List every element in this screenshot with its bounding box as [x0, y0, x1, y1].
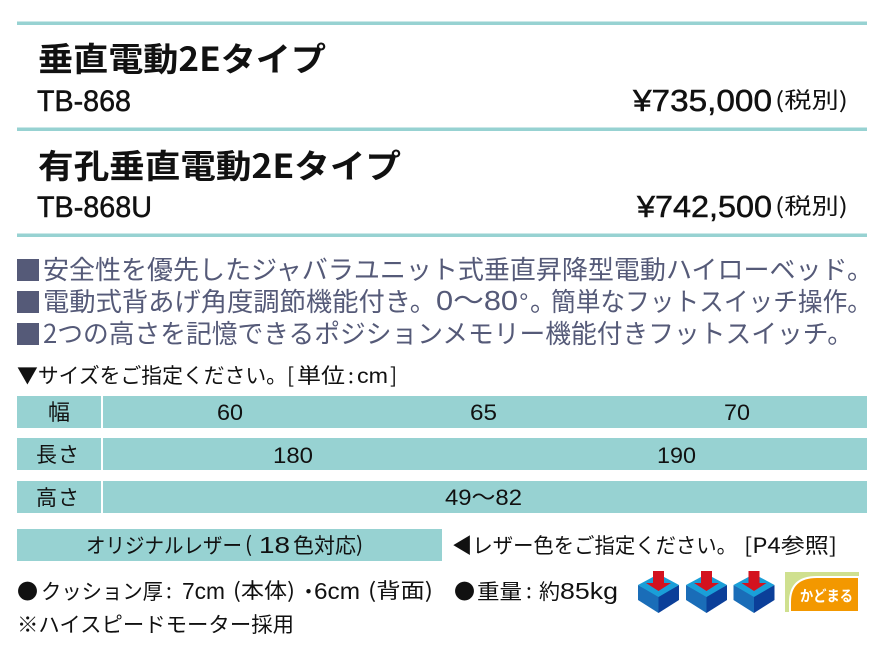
price 2: (税別) [775, 189, 848, 221]
size heading: ] [390, 360, 397, 390]
cushion spec: (背面) [368, 575, 433, 605]
size table: length: 180 [273, 443, 313, 468]
cushion spec: クッション厚 [41, 576, 163, 606]
model number 1: TB-868 [37, 85, 131, 118]
size table: length [17, 438, 867, 470]
title: model 1: 垂直電動2Eタイプ [38, 33, 326, 81]
weight spec: 約 [539, 576, 560, 606]
leather bar: 色対応 [293, 530, 356, 560]
icon: box with arrow 3 [734, 571, 774, 613]
size table: length: 長さ [36, 439, 80, 469]
icon: box with arrow 1 [638, 571, 679, 613]
leather bar: ( [245, 529, 252, 559]
feature list: 0〜80 [436, 285, 518, 316]
size table: height [17, 481, 867, 513]
feature list [17, 250, 873, 351]
size table: width [17, 395, 867, 428]
size heading: ▼サイズをご指定ください。 [17, 360, 287, 390]
price 1 [632, 83, 848, 118]
icon: kadomaru badge: かどまる [800, 585, 853, 606]
size heading: 単位 [297, 360, 345, 390]
cushion spec: (本体) [233, 575, 295, 605]
size heading: cm [357, 365, 388, 388]
size table: height: 49〜82 [445, 485, 522, 510]
feature list: 2つの高さを記憶できるポジションメモリー機能付きフットスイッチ。 [43, 314, 853, 351]
price 2: ¥742,500 [636, 189, 772, 224]
size table: width: 60 [217, 400, 243, 425]
price 2 [636, 189, 848, 224]
size table: width: 70 [724, 400, 750, 425]
title: model 2: 有孔垂直電動2Eタイプ [38, 140, 401, 188]
leather colour note: [P4参照] [744, 530, 837, 560]
weight spec: 85kg [560, 578, 618, 604]
cushion spec: 6cm [314, 578, 360, 604]
feature list: 安全性を優先したジャバラユニット式垂直昇降型電動ハイローベッド。 [43, 250, 873, 287]
cushion spec: : [166, 575, 172, 605]
model number 2: TB-868U [37, 191, 152, 224]
leather bar: ) [356, 529, 363, 559]
weight spec [454, 575, 618, 606]
size table: length: 190 [657, 443, 696, 468]
cushion spec: ● [17, 576, 38, 606]
leather colour note: ◀レザー色をご指定ください。 [452, 530, 737, 560]
leather bar: 18 [259, 532, 290, 558]
size heading: : [348, 360, 354, 390]
cushion spec: 7cm [182, 578, 225, 604]
cushion spec [17, 575, 433, 606]
weight spec: : [526, 575, 532, 605]
leather bar [17, 529, 442, 561]
size heading: [ [287, 360, 294, 390]
cushion spec: ・ [298, 576, 319, 606]
motor note: ※ハイスピードモーター採用 [17, 609, 294, 639]
header rules [17, 22, 867, 237]
size table: width: 幅 [48, 395, 70, 427]
feature list: 。 [530, 282, 556, 319]
price 1: (税別) [775, 83, 848, 115]
weight spec: 重量 [477, 576, 522, 606]
feature list: 簡単なフットスイッチ操作。 [551, 282, 872, 319]
icon: box with arrow 2 [686, 571, 727, 613]
icon: kadomaru badge [785, 570, 861, 615]
weight spec: ● [454, 576, 475, 606]
price 1: ¥735,000 [632, 83, 772, 118]
size table: height: 高さ [36, 482, 80, 512]
leather bar: オリジナルレザー [86, 530, 242, 560]
size table: width: 65 [470, 400, 497, 425]
feature list: 電動式背あげ角度調節機能付き。 [43, 282, 436, 319]
feature list: ° [519, 289, 529, 316]
